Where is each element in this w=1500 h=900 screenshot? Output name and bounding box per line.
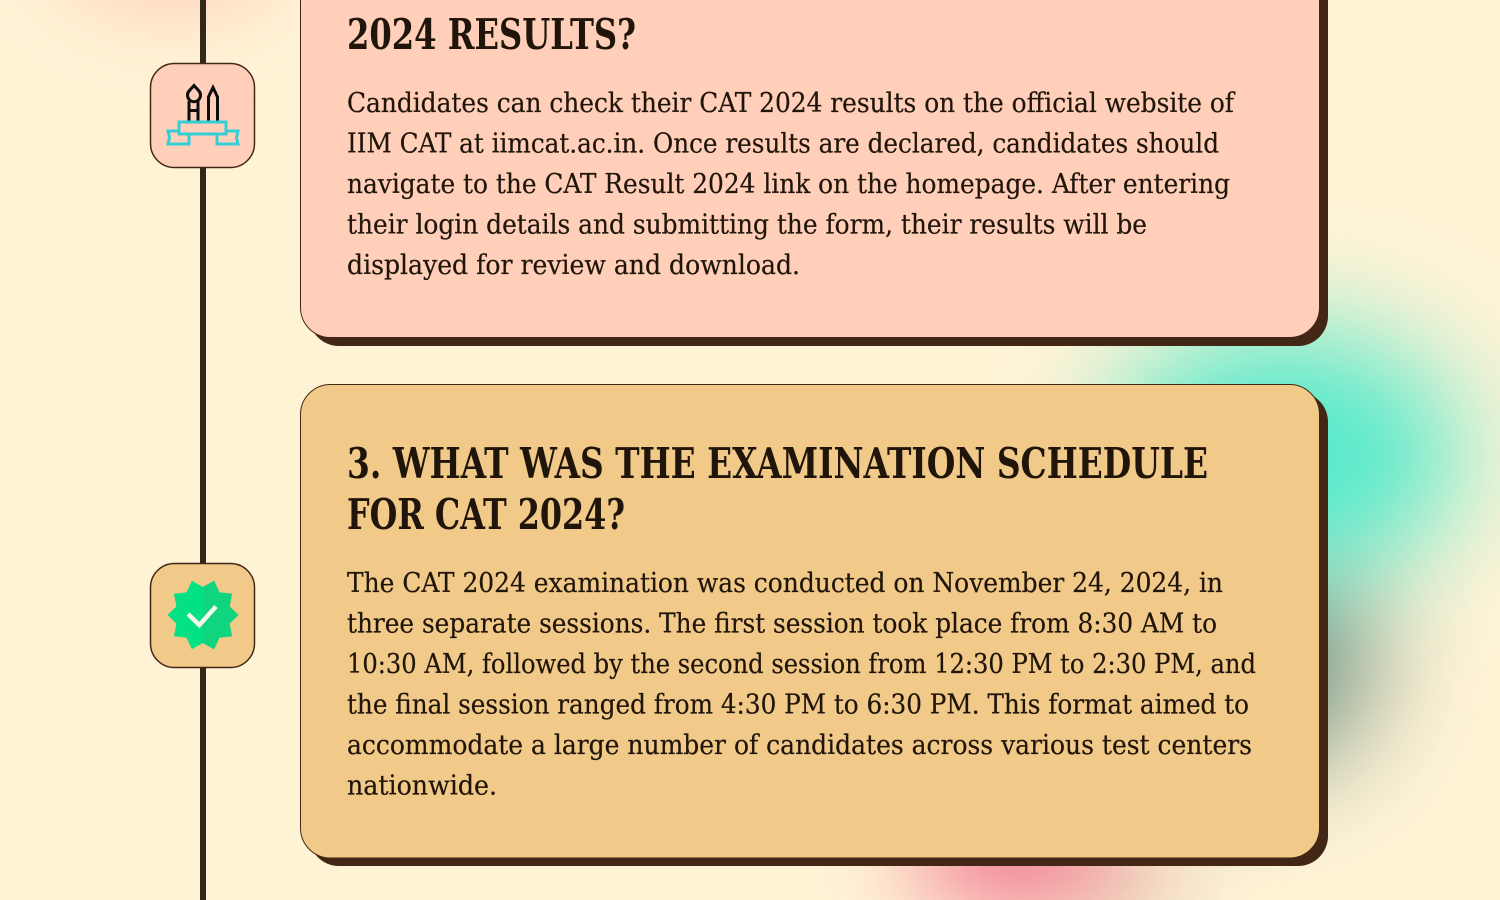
card body	[300, 0, 1320, 338]
heading: FOR CAT 2024?	[347, 490, 625, 539]
body text	[347, 88, 1236, 281]
body text: nationwide.	[347, 770, 497, 802]
panel: results card	[300, 0, 1328, 346]
card shadow	[309, 392, 1328, 866]
body text: accommodate a large number of candidates across various test centers	[347, 730, 1252, 761]
heading: 3. WHAT WAS THE EXAMINATION SCHEDULE	[347, 439, 1208, 488]
heading: 2024 RESULTS?	[347, 10, 636, 59]
card body	[300, 384, 1320, 858]
timeline line	[200, 0, 206, 900]
body text: their login details and submitting the form, their results will be	[347, 210, 1147, 240]
icon: brushes and ribbon	[150, 64, 254, 168]
body text: the final session ranged from 4:30 PM to 6:30 PM. This format aimed to	[347, 690, 1249, 720]
body text: 10:30 AM, followed by the second session from 12:30 PM to 2:30 PM, and	[347, 649, 1256, 680]
card shadow	[309, 0, 1328, 346]
body text: The CAT 2024 examination was conducted on November 24, 2024, in	[347, 568, 1223, 599]
body text: Candidates can check their CAT 2024 results on the official website of	[347, 88, 1236, 119]
body text: IIM CAT at iimcat.ac.in. Once results are declared, candidates should	[347, 128, 1219, 160]
icon: verified badge	[150, 564, 254, 668]
body text: displayed for review and download.	[347, 250, 800, 281]
body text: three separate sessions. The first session took place from 8:30 AM to	[347, 608, 1217, 640]
body text	[347, 568, 1256, 802]
panel: schedule card	[300, 384, 1328, 866]
body text: navigate to the CAT Result 2024 link on the homepage. After entering	[347, 169, 1230, 200]
heading	[347, 439, 1208, 539]
